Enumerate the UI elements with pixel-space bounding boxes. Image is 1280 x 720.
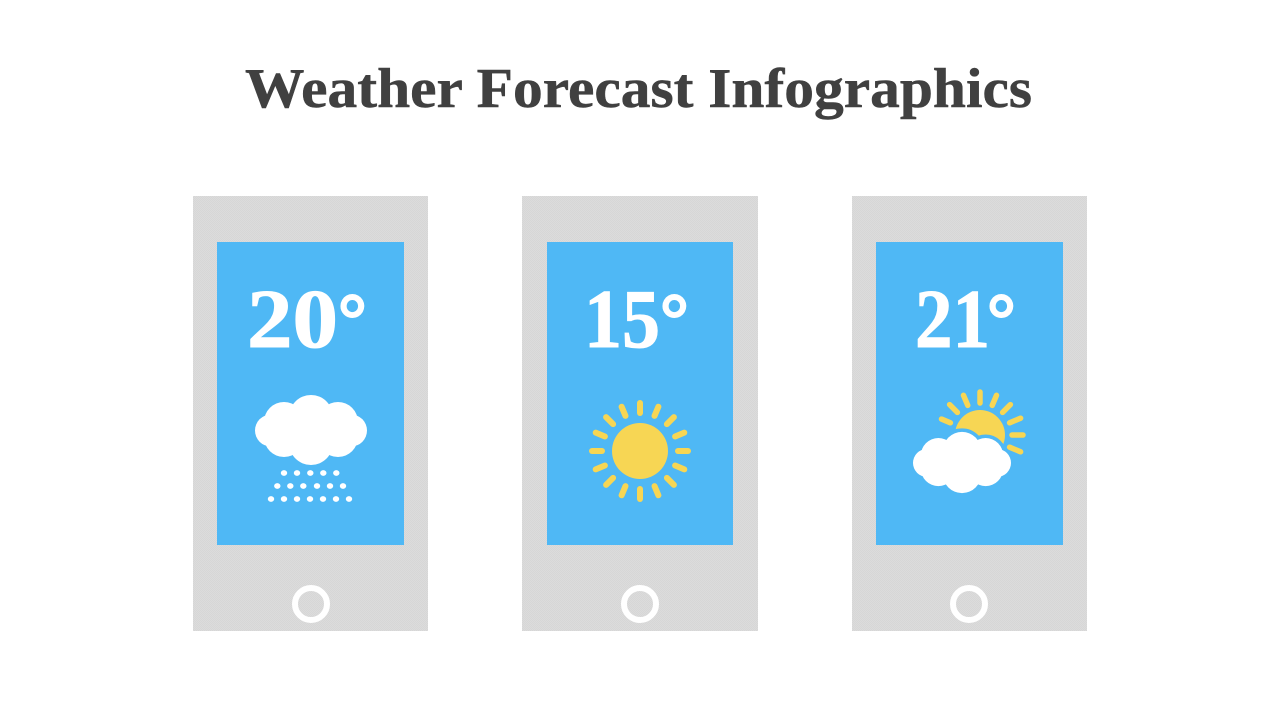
home button 1 xyxy=(295,588,327,620)
screen 1 xyxy=(217,242,404,545)
phone body 2 xyxy=(522,196,758,631)
phone body 3 xyxy=(852,196,1087,631)
temperature 21: 21 xyxy=(915,273,990,366)
home button 3 xyxy=(953,588,985,620)
panel: phone 3, 21 degrees partly cloudy xyxy=(852,196,1087,631)
temperature 20: ° xyxy=(338,279,367,359)
home button 2 xyxy=(624,588,656,620)
screen 3 xyxy=(876,242,1063,545)
icon: snow cloud xyxy=(255,395,367,502)
temperature 15: ° xyxy=(660,279,689,359)
title: Weather Forecast Infographics xyxy=(245,58,1032,120)
panel: phone 2, 15 degrees with sun xyxy=(522,196,758,631)
phone body 1 xyxy=(193,196,428,631)
icon: sun xyxy=(592,403,688,499)
panel: phone 1, 20 degrees with snow xyxy=(193,196,428,631)
screen 2 xyxy=(547,242,733,545)
temperature 20: 20 xyxy=(247,273,338,366)
temperature 15: 15 xyxy=(584,273,660,366)
icon: sun behind cloud xyxy=(913,392,1023,493)
temperature 21: ° xyxy=(987,279,1016,359)
